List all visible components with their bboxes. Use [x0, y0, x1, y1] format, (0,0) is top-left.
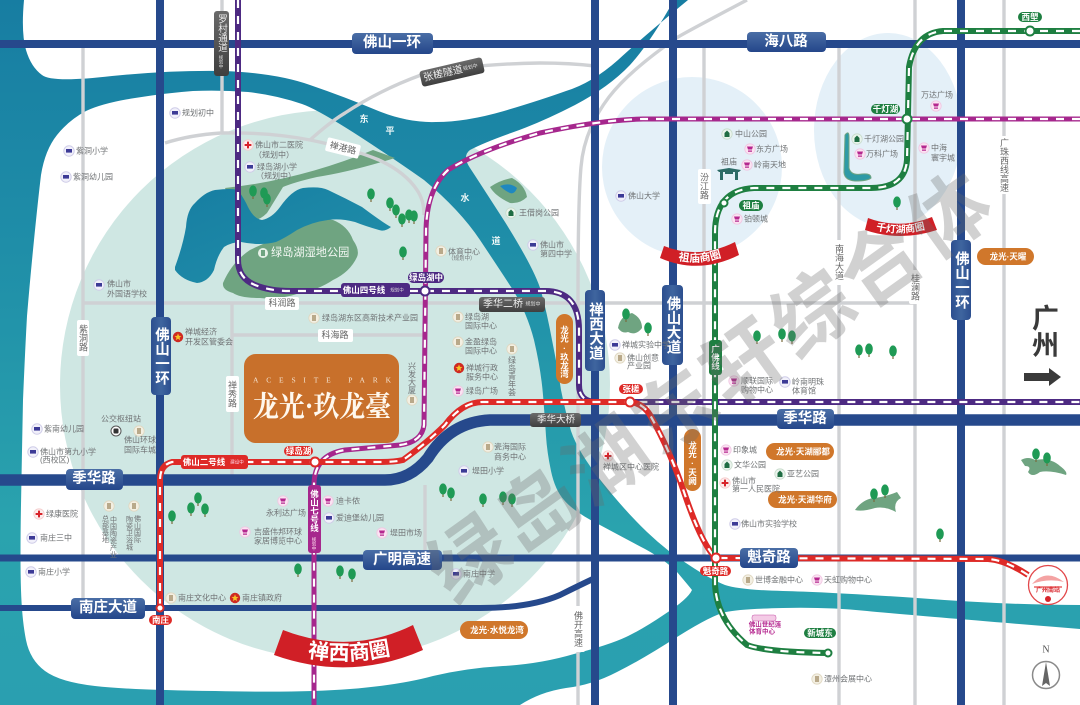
POI: west area: 陶瓷卫浴城: [126, 515, 133, 552]
trees: [168, 185, 1051, 582]
wetland park green: [223, 219, 358, 298]
metro tags: 佛山七号线: [310, 489, 320, 532]
water names: [359, 113, 501, 246]
business circle: Chanxi: [60, 110, 610, 660]
water names: 东: [359, 113, 369, 124]
POI: west area: 佛山市二医院: [255, 140, 303, 150]
white road tags: 广珠西线高速: [999, 137, 1009, 193]
highway labels: 海八路: [764, 32, 808, 50]
grey planned road tags: 季华大桥: [537, 414, 575, 426]
POI: east area: 文华公园: [734, 460, 766, 470]
metro tags: [149, 12, 1042, 638]
white road tags: 科海路: [321, 329, 349, 340]
highway labels: 广明高速: [373, 550, 431, 568]
highway labels: 禅西大道: [587, 302, 603, 360]
POI: west area: 国际车城: [124, 444, 156, 454]
POI: central area: 佛山市: [540, 240, 564, 250]
POI: central area: 服务中心: [466, 372, 498, 382]
banner: Chanxi business circle: 禅西商圈: [308, 638, 390, 662]
white road tags: 佛开高速: [573, 610, 583, 648]
POI: east area: 铂顿城: [744, 214, 768, 224]
metro tags: 佛山二号线: [183, 457, 226, 467]
compass: N: [1042, 644, 1050, 656]
Guangzhou South station: 广州南站: [1036, 586, 1060, 594]
grey planned road tags: 规划中: [218, 54, 224, 70]
POI: east area: 千灯湖公园: [864, 134, 904, 144]
POI: west area: 南庄文化中心: [178, 592, 226, 602]
POI: west area: 南庄三中: [40, 532, 72, 542]
POI: east area: 佛山市实验学校: [741, 518, 797, 528]
POI: east area: 中海: [931, 142, 947, 152]
POI: central area: 兴发大厦: [408, 362, 416, 394]
POI: west area: 公交枢纽站: [101, 414, 141, 424]
POI: east area: 购物中心: [741, 384, 773, 394]
POI: west area: 佛山环球: [124, 434, 156, 444]
POI: central area: 吉盛伟邦环球: [254, 526, 302, 536]
water names: 道: [491, 235, 501, 246]
POI: central area: [240, 208, 572, 579]
POI: west area: 规划初中: [182, 108, 214, 118]
banner: Qiandenghu business circle: 千灯湖商圈: [876, 221, 925, 234]
POI: east area: 亚艺公园: [787, 470, 819, 478]
POI: west area: （规划中）: [256, 170, 296, 180]
POI: central area: 瓷海国际: [494, 442, 526, 452]
POI: east area: 禅城区中心医院: [603, 462, 659, 472]
metro tags: 西塱: [1021, 12, 1039, 22]
project tags: 龙光·天湖华府: [778, 494, 832, 504]
highway labels: 佛山一环: [953, 251, 969, 309]
main project block: 龙光·玖龙臺: [253, 383, 391, 425]
Qiandenghu pond: [844, 133, 871, 181]
POI: east area: 万达广场: [921, 90, 953, 100]
island east 1: [855, 492, 901, 512]
POI: central area: 商务中心: [494, 452, 526, 462]
metro tags: 祖庙: [742, 200, 760, 210]
POI: west area: 绿康医院: [46, 508, 78, 518]
POI: east area: 岭南明珠: [792, 376, 824, 386]
POI: central area: 绿岛湖东区高新技术产业园: [322, 312, 418, 322]
metro tags: 规划中: [311, 536, 317, 552]
banner: Zumiao business circle: 祖庙商圈: [678, 248, 722, 263]
Chancheng pond: [618, 313, 642, 333]
POI: central area: 绿岛广场: [466, 386, 498, 396]
Guangzhou South station: [1028, 566, 1068, 604]
POI: east area: 佛山大学: [628, 190, 660, 200]
banner: Qiandenghu business circle: [865, 217, 937, 236]
POI: west area: （规划中）: [254, 150, 294, 160]
POI: west area: 佛山国际: [134, 514, 141, 544]
POI: west area: 总部基地: [102, 514, 109, 543]
metro tags: 新城东: [807, 628, 833, 638]
POI: east area: 天虹购物中心: [824, 574, 872, 584]
POI: central area: 绿岛湖: [465, 312, 489, 322]
project tags: 龙光·水悦龙湾: [470, 625, 524, 635]
POI: east area: 中山公园: [735, 128, 767, 138]
grey planned road tags: [214, 11, 581, 427]
POI: east area: 禅城实验中学: [622, 340, 670, 350]
compass: [1032, 644, 1060, 688]
POI: east area: 寰宇城: [931, 152, 955, 162]
POI: east area: 佛山世纪莲: [749, 620, 782, 628]
POI: west area: 南庄小学: [38, 566, 70, 576]
POI: east area: 东方广场: [756, 144, 788, 154]
POI: central area: 体育中心: [448, 246, 480, 256]
POI: east area: 第一人民医院: [732, 484, 780, 494]
white road tags: 紫洞路: [78, 324, 88, 352]
metro tags: 广佛线: [710, 344, 720, 370]
highway labels: 佛山一环: [363, 34, 421, 51]
metro line 4 purple: [238, 0, 1080, 402]
highway labels: 佛山大道: [664, 296, 681, 354]
metro tags: 魁奇路: [703, 566, 729, 576]
white road tags: 汾江路: [699, 172, 709, 200]
POI: west area: 开发区管委会: [185, 336, 233, 346]
POI: west area: 禅城经济: [185, 326, 217, 336]
POI: central area: 迪卡侬: [336, 496, 360, 506]
Guangzhou direction: 广州: [1028, 304, 1058, 358]
highway labels: 季华路: [783, 409, 827, 427]
POI: west area: 紫洞幼儿园: [73, 172, 113, 182]
metro tags: 张槎: [622, 384, 640, 394]
POI: west area: 紫洞小学: [76, 146, 108, 156]
main project block: ACESITE PARK: [253, 376, 392, 384]
metro tags: 规划中: [390, 286, 404, 294]
grey planned road tags: 规划中: [462, 62, 479, 72]
POI: central area: 国际中心: [465, 320, 497, 330]
POI: central area: 家居博览中心: [254, 536, 302, 546]
metro line Guangfo green: [715, 31, 1080, 653]
POI: central area: 永利达广场: [266, 508, 306, 518]
POI: central area: 绿岛青年荟: [508, 356, 516, 397]
POI: central area: 王借岗公园: [519, 208, 559, 218]
POI: west area: 佛山市: [107, 278, 131, 288]
POI: west area: 中国陶瓷产业: [110, 515, 117, 558]
POI: central area: （规划中）: [448, 254, 476, 262]
island east 2: [1021, 458, 1066, 475]
highway labels: 魁奇路: [747, 548, 791, 566]
white road tags: 科润路: [268, 297, 296, 308]
highway labels: [66, 32, 971, 619]
wetland green strip: [225, 150, 395, 220]
project tags: 龙光·天阙: [688, 440, 698, 486]
banner: Chanxi business circle: [274, 625, 423, 668]
watermark: 绿岛湖东轩综合体: [412, 156, 1008, 620]
metro line 7 magenta: [314, 119, 1080, 705]
POI: east area: 佛山市: [732, 476, 756, 486]
business circle: Qiandenghu: [814, 33, 962, 227]
metro tags: 千灯湖: [873, 104, 899, 114]
POI: east area: 岭南天地: [754, 160, 786, 170]
POI: west area: (西校区): [40, 454, 70, 464]
grey planned road tags: 罗村通道: [216, 14, 228, 53]
POI: east area: 体育馆: [792, 386, 816, 396]
POI: west area: [26, 108, 303, 603]
metro tags: 南庄: [152, 615, 169, 625]
POI: east area: 万科广场: [866, 148, 898, 158]
white road tags: 桂澜路: [910, 272, 920, 301]
POI: central area: 国际中心: [465, 346, 497, 356]
POI: east area: 潭州会展中心: [824, 674, 872, 684]
metro tags: 佛山四号线: [343, 285, 386, 295]
POI: east area: [603, 90, 955, 684]
white road tags: 南海大道: [834, 243, 844, 281]
Guangzhou direction: [1024, 304, 1061, 386]
POI: central area: 金盈绿岛: [465, 336, 497, 346]
POI: east area: 世博金融中心: [755, 574, 803, 584]
POI: west area: 绿岛湖小学: [257, 162, 297, 172]
POI: west area: 紫南幼儿园: [44, 424, 84, 434]
POI: central area: 堤田市场: [390, 528, 422, 538]
highway labels: 季华路: [72, 469, 116, 487]
business circle: Zumiao: [602, 77, 782, 257]
metro line 2 red: [160, 402, 1028, 608]
project tags: 龙光·天湖郦都: [776, 446, 830, 456]
metro tags: 绿岛湖: [286, 446, 312, 456]
white road tags: 禅秀路: [227, 379, 237, 408]
POI: east area: 顺联国际: [741, 376, 773, 386]
highway labels: 佛山一环: [153, 327, 169, 385]
POI: east area: 佛山创意: [627, 352, 659, 362]
POI: west area: 外国语学校: [107, 288, 147, 298]
POI: central area: 堤田小学: [472, 466, 504, 476]
white road tags: 禅港路: [329, 139, 358, 156]
project tags: 龙光·玖龙湾: [560, 325, 570, 379]
grey planned road tags: 季华二桥: [483, 297, 523, 310]
project tags: 龙光·天曜: [990, 252, 1027, 262]
white road tags: [77, 136, 1011, 652]
POI: east area: 印象城: [733, 444, 757, 454]
POI: central area: 第四中学: [540, 248, 572, 258]
project tags: [460, 248, 1034, 639]
banner: Zumiao business circle: [660, 242, 739, 266]
POI: central area: 禅城行政: [466, 362, 498, 372]
POI: west area: 佛山市第九小学: [40, 446, 96, 456]
Wangjiegang island: [490, 178, 527, 203]
highway labels: 南庄大道: [79, 598, 137, 616]
metro tags: 绿岛湖中: [409, 272, 443, 282]
wetland lake: [175, 187, 391, 283]
POI: east area: 祖庙: [721, 156, 737, 166]
POI: central area: 爱迪堡幼儿园: [336, 512, 384, 522]
POI: east area: 体育中心: [749, 626, 776, 636]
POI: central area: 南庄中学: [463, 568, 495, 578]
POI: east area: 产业园: [627, 360, 651, 370]
metro tags: 建设中: [230, 458, 244, 466]
water names: 水: [460, 192, 470, 203]
wetland label: 绿岛湖湿地公园: [271, 245, 349, 259]
POI: west area: 南庄镇政府: [242, 592, 282, 602]
water names: 平: [385, 126, 395, 136]
grey planned road tags: 张槎隧道: [422, 62, 464, 84]
main project block: [244, 354, 399, 443]
grey planned road tags: 规划中: [525, 300, 541, 308]
stations: [156, 26, 1034, 656]
